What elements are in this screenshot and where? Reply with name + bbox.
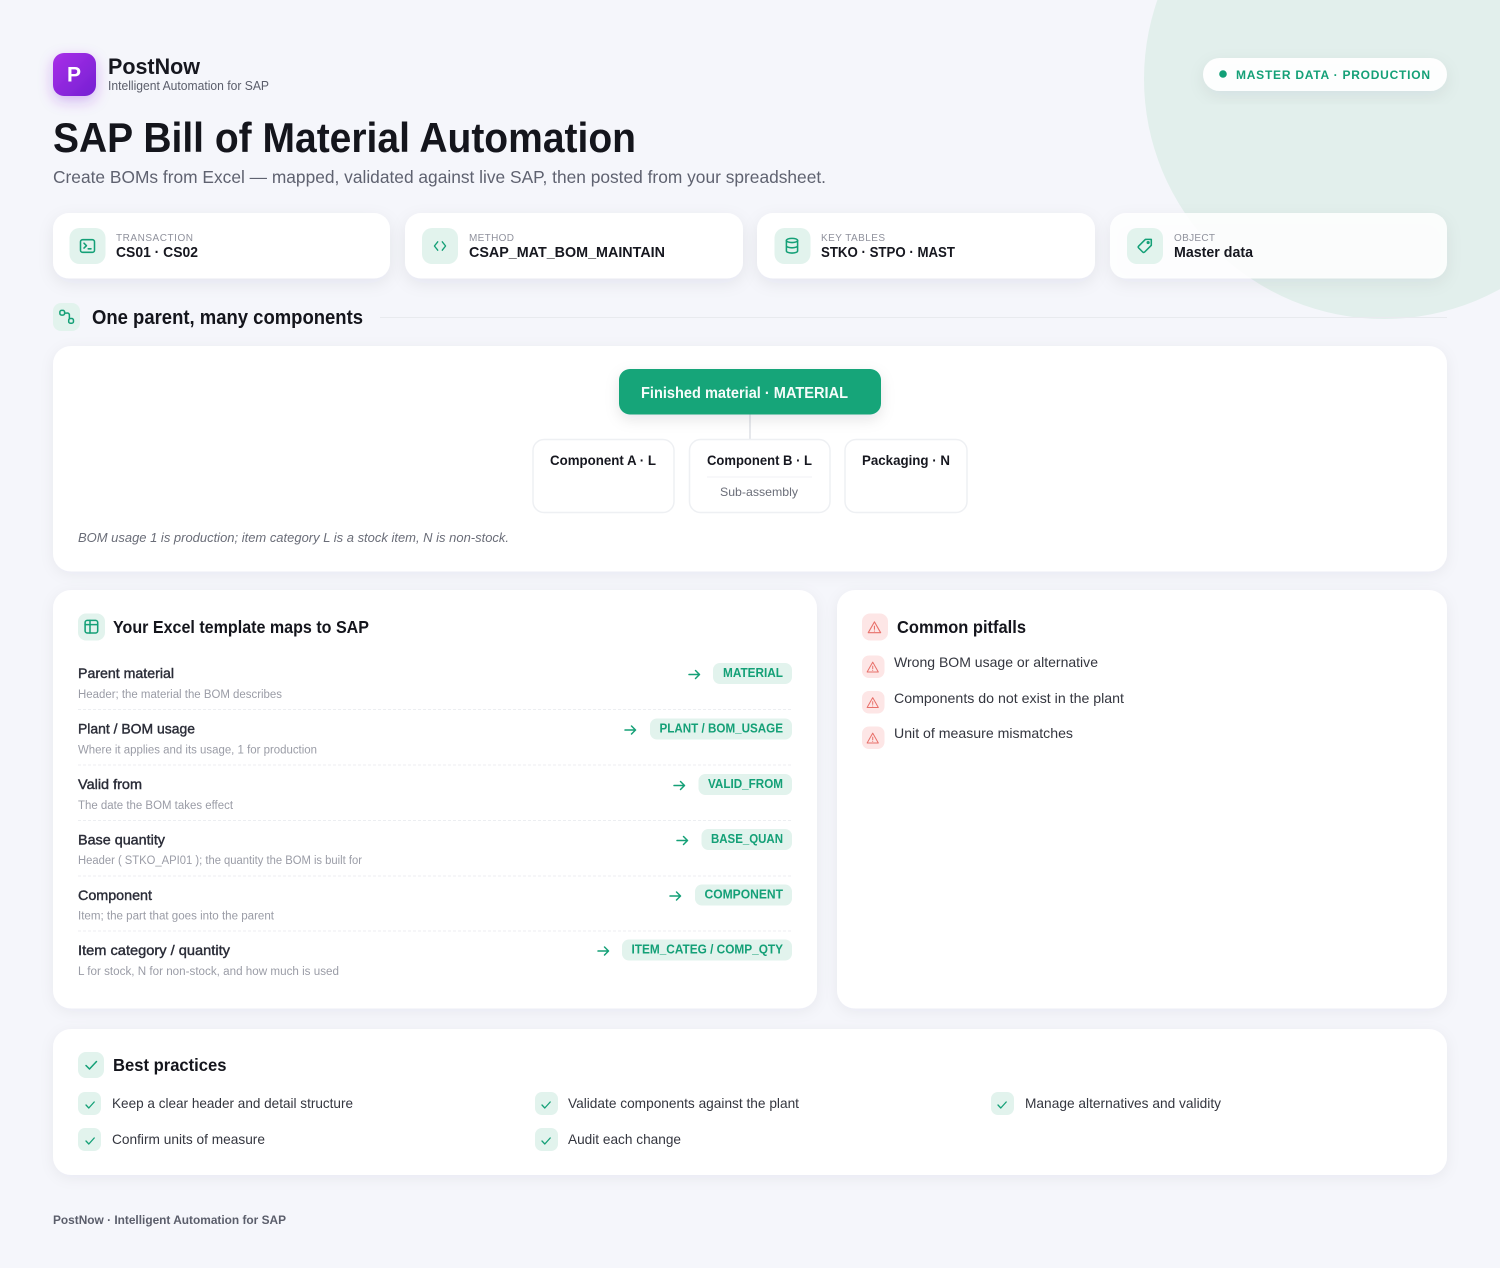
brand name: PostNow bbox=[108, 54, 201, 79]
heading: excel template bbox=[78, 614, 369, 640]
decorative circle bbox=[1144, 0, 1500, 319]
panel: method: METHOD bbox=[469, 233, 514, 244]
panel: object: OBJECT bbox=[1174, 233, 1215, 244]
brand tagline: Intelligent Automation for SAP bbox=[108, 79, 269, 93]
panel: common pitfalls bbox=[837, 590, 1447, 1008]
heading: common pitfalls bbox=[862, 614, 1026, 640]
row: item category and quantity: L for stock, N for non-stock, and how much is used bbox=[78, 966, 339, 978]
row: plant and BOM usage: PLANT / BOM_USAGE bbox=[660, 722, 783, 736]
heading: excel template: Your Excel template maps to SAP bbox=[113, 617, 369, 637]
pitfall: wrong BOM usage bbox=[862, 654, 1098, 678]
row: plant and BOM usage bbox=[78, 718, 792, 765]
subtitle: Create BOMs from Excel — mapped, validated against live SAP, then posted from your spreadsheet. bbox=[53, 167, 826, 187]
row: valid from: The date the BOM takes effect bbox=[78, 800, 234, 812]
node: packaging: Packaging · N bbox=[862, 452, 950, 468]
title: SAP Bill of Material Automation bbox=[53, 114, 636, 161]
row: base quantity bbox=[78, 829, 792, 876]
row: parent material: MATERIAL bbox=[723, 666, 783, 680]
row: parent material: Parent material bbox=[78, 665, 174, 681]
heading: one parent, many components bbox=[53, 303, 363, 331]
node: component A bbox=[533, 440, 674, 512]
pitfall: unit mismatch bbox=[862, 725, 1073, 749]
practice: validate components bbox=[535, 1092, 799, 1115]
row: plant and BOM usage: Plant / BOM usage bbox=[78, 720, 195, 736]
logo: PostNow brand bbox=[53, 53, 269, 96]
pitfall: wrong BOM usage: Wrong BOM usage or alternative bbox=[894, 654, 1098, 670]
practice: alternatives and validity bbox=[991, 1092, 1221, 1115]
panel: method: CSAP_MAT_BOM_MAINTAIN bbox=[469, 244, 665, 261]
note: BOM usage 1 is production; item category L is a stock item, N is non-stock. bbox=[78, 530, 509, 545]
node: component A: Component A · L bbox=[550, 452, 656, 468]
node: component B bbox=[690, 440, 830, 512]
row: component: COMPONENT bbox=[704, 888, 783, 902]
parent node bbox=[619, 369, 881, 414]
row: base quantity: BASE_QUAN bbox=[711, 832, 783, 846]
pitfall: components missing: Components do not exist in the plant bbox=[894, 690, 1124, 706]
heading: best practices bbox=[78, 1052, 227, 1078]
row: component: Component bbox=[78, 887, 152, 903]
panel: object: Master data bbox=[1174, 244, 1254, 261]
footer: PostNow · Intelligent Automation for SAP bbox=[53, 1213, 286, 1227]
icon: code bbox=[434, 242, 446, 250]
row: valid from: Valid from bbox=[78, 776, 142, 792]
row: item category and quantity: Item category / quantity bbox=[78, 942, 230, 958]
row: valid from: VALID_FROM bbox=[708, 777, 783, 791]
row: item category and quantity: ITEM_CATEG / COMP_QTY bbox=[632, 942, 784, 956]
pitfall: components missing bbox=[862, 690, 1124, 714]
icon: hierarchy bbox=[60, 310, 73, 323]
node: component B: Component B · L bbox=[707, 452, 812, 468]
panel: transaction: TRANSACTION bbox=[116, 233, 193, 244]
practice: units of measure bbox=[78, 1128, 265, 1151]
icon: database bbox=[786, 238, 798, 253]
practice: audit changes bbox=[535, 1128, 681, 1151]
parent node: Finished material · MATERIAL bbox=[641, 385, 848, 402]
row: parent material bbox=[78, 663, 792, 710]
heading: common pitfalls: Common pitfalls bbox=[897, 617, 1026, 637]
panel: BOM hierarchy bbox=[53, 346, 1447, 572]
panel: transaction: CS01 · CS02 bbox=[116, 244, 198, 261]
pitfall: unit mismatch: Unit of measure mismatches bbox=[894, 725, 1073, 741]
icon: P logo tile bbox=[53, 53, 96, 96]
practice: units of measure: Confirm units of measure bbox=[112, 1131, 265, 1147]
row: base quantity: Base quantity bbox=[78, 832, 165, 848]
heading: best practices: Best practices bbox=[113, 1055, 227, 1075]
row: component: Item; the part that goes into the parent bbox=[78, 910, 275, 922]
row: valid from bbox=[78, 774, 792, 820]
practice: audit changes: Audit each change bbox=[568, 1131, 681, 1147]
practice: header and detail: Keep a clear header and detail structure bbox=[112, 1095, 353, 1111]
row: item category and quantity bbox=[78, 940, 792, 978]
row: plant and BOM usage: Where it applies and its usage, 1 for production bbox=[78, 744, 317, 756]
node: component B: Sub-assembly bbox=[720, 485, 798, 499]
row: parent material: Header; the material the BOM describes bbox=[78, 689, 282, 701]
panel: key tables: KEY TABLES bbox=[821, 233, 885, 244]
panel: transaction bbox=[53, 213, 390, 278]
panel: best practices bbox=[53, 1029, 1447, 1175]
heading: one parent, many components: One parent, many components bbox=[92, 307, 363, 329]
badge: master data production: MASTER DATA · PRODUCTION bbox=[1236, 68, 1430, 82]
badge: master data production bbox=[1203, 58, 1447, 91]
practice: alternatives and validity: Manage alternatives and validity bbox=[1025, 1095, 1221, 1111]
panel: key tables bbox=[757, 213, 1095, 278]
panel: method bbox=[405, 213, 743, 278]
row: component bbox=[78, 884, 792, 931]
icon: P logo tile: P bbox=[67, 64, 81, 86]
row: base quantity: Header ( STKO_API01 ); the quantity the BOM is built for bbox=[78, 855, 362, 867]
practice: validate components: Validate components against the plant bbox=[568, 1095, 799, 1111]
panel: key tables: STKO · STPO · MAST bbox=[821, 244, 955, 261]
node: packaging bbox=[845, 440, 967, 512]
panel: excel template mapping bbox=[53, 590, 817, 1008]
panel: object bbox=[1110, 213, 1447, 278]
practice: header and detail bbox=[78, 1092, 353, 1115]
icon: terminal bbox=[80, 240, 94, 252]
icon: tag bbox=[1138, 239, 1151, 252]
